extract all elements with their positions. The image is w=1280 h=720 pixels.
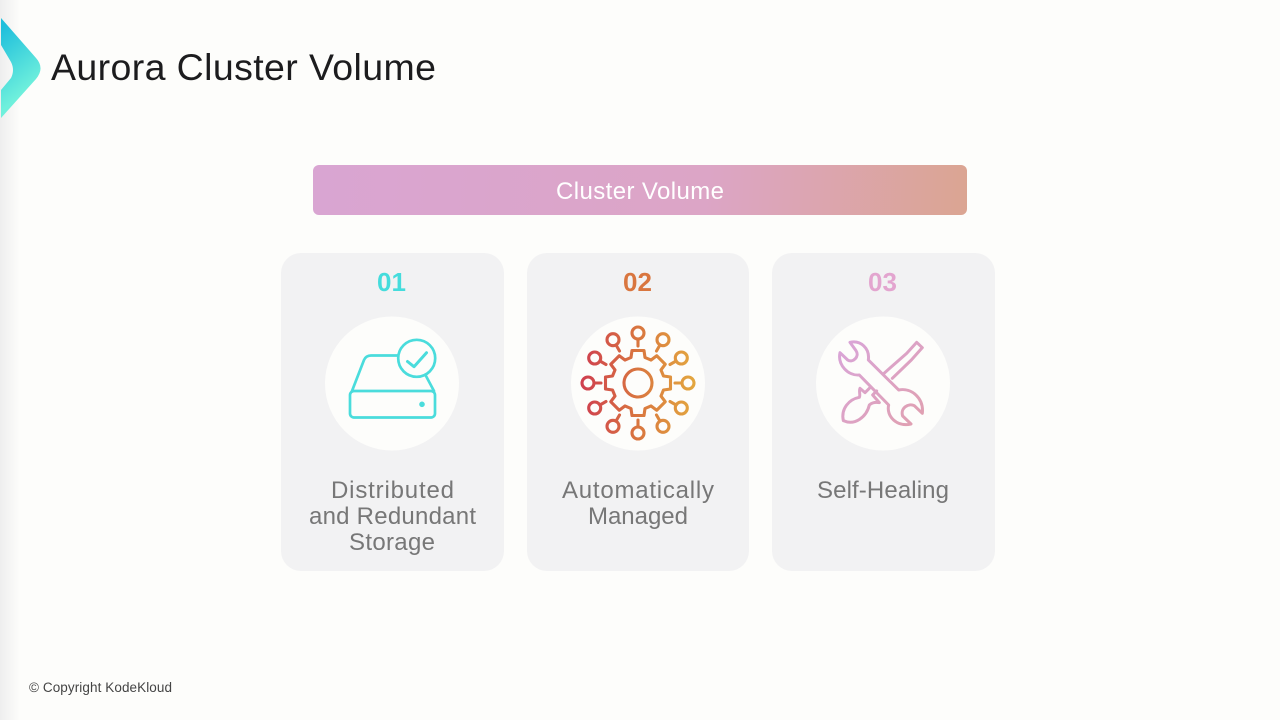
label: Distributed: [331, 477, 454, 504]
label: Managed: [588, 503, 688, 530]
label: [562, 477, 714, 530]
icon: storage drive with check: [325, 316, 459, 450]
copyright footer: © Copyright KodeKloud: [29, 680, 172, 695]
label: and Redundant: [309, 503, 476, 530]
icon: wrench and screwdriver: [816, 316, 950, 450]
number 03: 03: [868, 267, 897, 297]
label: [309, 477, 476, 556]
panel: automatically managed: [527, 253, 749, 571]
panel: distributed storage: [281, 253, 504, 571]
label: Storage: [349, 529, 435, 556]
panel: self-healing: [772, 253, 995, 571]
title: Aurora Cluster Volume: [51, 46, 436, 88]
number 01: 01: [377, 267, 406, 297]
logo chevron: [1, 18, 40, 118]
number 02: 02: [623, 267, 652, 297]
icon: gear with nodes: [571, 316, 705, 450]
label: Automatically: [562, 477, 714, 504]
label: Self-Healing: [817, 477, 949, 504]
banner: Cluster Volume: [313, 165, 967, 215]
banner: Cluster Volume: Cluster Volume: [556, 178, 724, 205]
left edge shadow: [0, 0, 20, 720]
